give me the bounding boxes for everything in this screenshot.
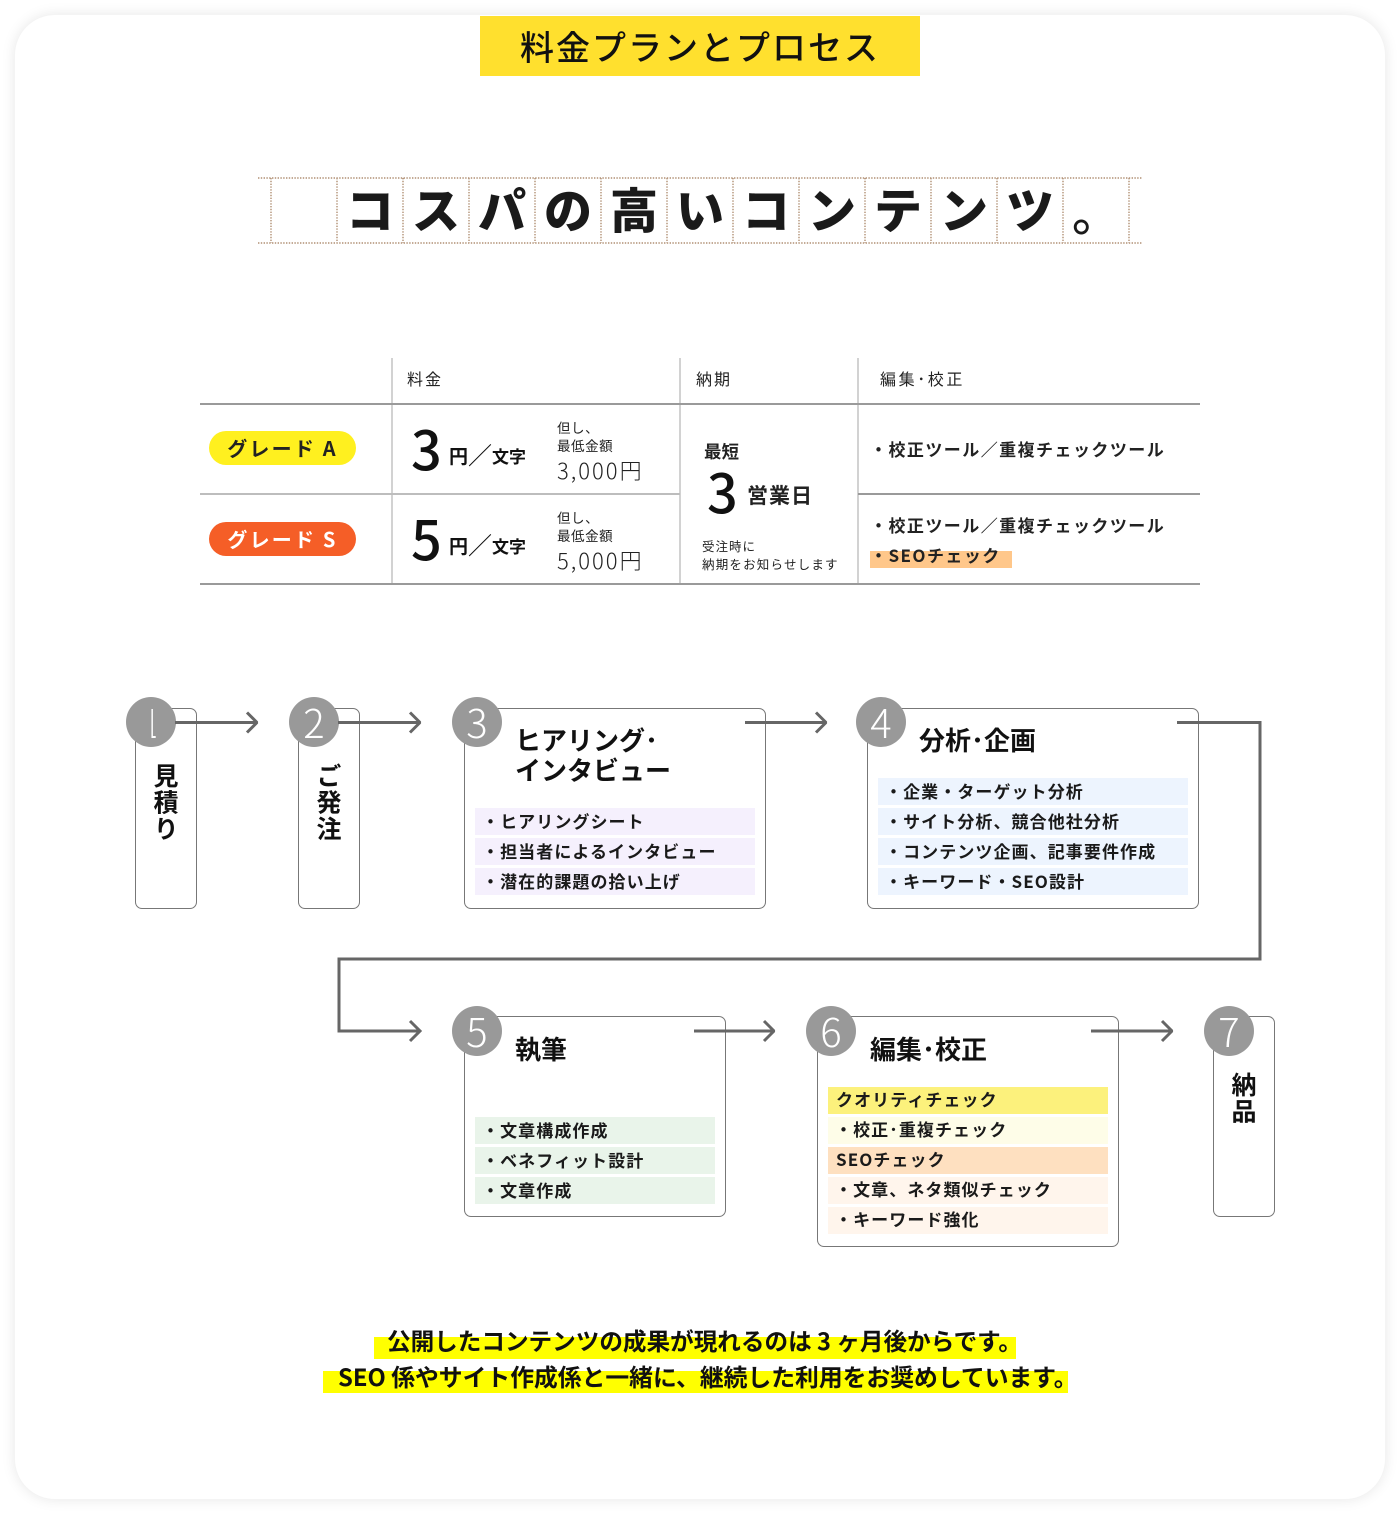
heading: dotted grid headline: ン [940, 172, 988, 242]
price S: 5 [411, 497, 442, 576]
step 2: ご発注 [311, 763, 347, 842]
step 5: 執筆 [515, 1030, 567, 1067]
step 1: 1 [140, 692, 162, 750]
minimum fee S: 5,000円 [557, 544, 644, 576]
step 5: ・文章構成作成 [482, 1117, 609, 1142]
minimum fee A: 3,000円 [557, 454, 644, 486]
step 5: ・ベネフィット設計 [482, 1147, 644, 1172]
editing A: ・校正ツール／重複チェックツール [870, 436, 1165, 461]
minimum fee A: 最低金額 [557, 435, 613, 455]
step 4 [856, 692, 1199, 909]
step 5: 5 [466, 1001, 488, 1059]
heading: dotted grid headline: ン [808, 172, 856, 242]
step 6: 6 [820, 1001, 842, 1059]
delivery time [702, 439, 839, 573]
step 7: 納品 [1226, 1072, 1262, 1125]
price A: 円／文字 [449, 436, 526, 471]
arrow: 3 to 4 [745, 712, 826, 732]
heading: dotted grid headline: 高 [610, 172, 658, 242]
step 3: ・潜在的課題の拾い上げ [482, 868, 681, 893]
step 5 [452, 1001, 726, 1217]
editing S: ・校正ツール／重複チェックツール [870, 512, 1165, 537]
delivery time: 3 [707, 450, 738, 529]
step 6: クオリティチェック [836, 1086, 998, 1111]
step 4: 分析･企画 [919, 721, 1036, 758]
arrow: 1 to 2 [175, 712, 257, 732]
step 3: インタビュー [515, 751, 671, 788]
panel: pricing table [200, 358, 1200, 585]
minimum fee S: 但し、 [557, 507, 599, 527]
step 1: 見積り [148, 763, 184, 842]
price S: 円／文字 [449, 526, 526, 561]
delivery time: 営業日 [747, 480, 813, 510]
step 4: ・コンテンツ企画、記事要件作成 [885, 838, 1156, 863]
step 7: 7 [1218, 1001, 1240, 1059]
SEO check label: ・SEOチェック [870, 542, 1001, 567]
step 3 [452, 692, 766, 909]
step 6: ・キーワード強化 [835, 1206, 980, 1231]
heading: dotted grid headline: ス [412, 172, 460, 242]
arrow: 5 to 6 [694, 1021, 774, 1041]
table header: 編集・校正: 編集･校正 [880, 366, 965, 390]
heading: dotted grid headline: テ [874, 172, 922, 242]
delivery time: 納期をお知らせします [702, 554, 839, 573]
table header: 納期: 納期 [696, 366, 732, 390]
heading: dotted grid headline: 。 [1072, 175, 1120, 245]
grade S pill [209, 522, 356, 556]
grade S pill: グレード S [227, 524, 338, 553]
callout: closing message [323, 1323, 1078, 1393]
arrow: 6 to 7 [1091, 1021, 1172, 1041]
SEO check highlight [870, 551, 1012, 568]
step 7 [1204, 1001, 1275, 1217]
step 6 [806, 1001, 1119, 1247]
step 3: ・ヒアリングシート [482, 808, 645, 833]
table header: 料金: 料金 [407, 366, 443, 390]
callout: closing message: SEO 係やサイト作成係と一緒に、継続した利用をお奨めしています。 [338, 1358, 1078, 1393]
price A: 3 [411, 407, 442, 486]
callout: closing message: 公開したコンテンツの成果が現れるのは 3 ヶ月後からです。 [387, 1323, 1022, 1357]
arrow: 2 to 3 [338, 712, 420, 732]
step 3: ヒアリング･ [515, 721, 658, 758]
heading: dotted grid headline: コ [742, 172, 790, 242]
step 3: 3 [466, 692, 488, 750]
step 2 [289, 692, 360, 909]
step 4: 4 [870, 692, 892, 750]
price A [411, 407, 526, 486]
minimum fee A: 但し、 [557, 417, 599, 437]
step 2: 2 [303, 692, 325, 750]
step 4: ・キーワード・SEO設計 [885, 868, 1085, 893]
step 6: ・校正･重複チェック [835, 1116, 1007, 1141]
heading: dotted grid headline: コ [346, 172, 394, 242]
step 4: ・サイト分析、競合他社分析 [885, 808, 1120, 833]
heading: dotted grid headline: の [544, 172, 592, 242]
minimum fee S [557, 507, 644, 576]
arrow: 4 to 5 [339, 722, 1260, 1041]
step 6: 編集･校正 [870, 1030, 987, 1067]
step 6: SEOチェック [836, 1146, 946, 1171]
title: 料金プランとプロセス [520, 21, 880, 70]
step 5: ・文章作成 [482, 1177, 572, 1202]
step 3: ・担当者によるインタビュー [482, 838, 717, 863]
step 4: ・企業・ターゲット分析 [885, 778, 1084, 803]
heading: dotted grid headline: パ [478, 172, 526, 242]
heading: dotted grid headline: い [676, 172, 724, 242]
grade A pill: グレード A [227, 433, 338, 462]
delivery time: 受注時に [702, 536, 756, 555]
heading: dotted grid headline [258, 172, 1142, 245]
heading: dotted grid headline: ツ [1006, 172, 1054, 242]
price S [411, 497, 526, 576]
step 6: ・文章、ネタ類似チェック [835, 1176, 1052, 1201]
grade A pill [209, 431, 356, 465]
minimum fee A [557, 417, 644, 486]
minimum fee S: 最低金額 [557, 525, 613, 545]
delivery time: 最短 [704, 439, 739, 464]
title [480, 16, 920, 76]
step 1 [126, 697, 197, 909]
